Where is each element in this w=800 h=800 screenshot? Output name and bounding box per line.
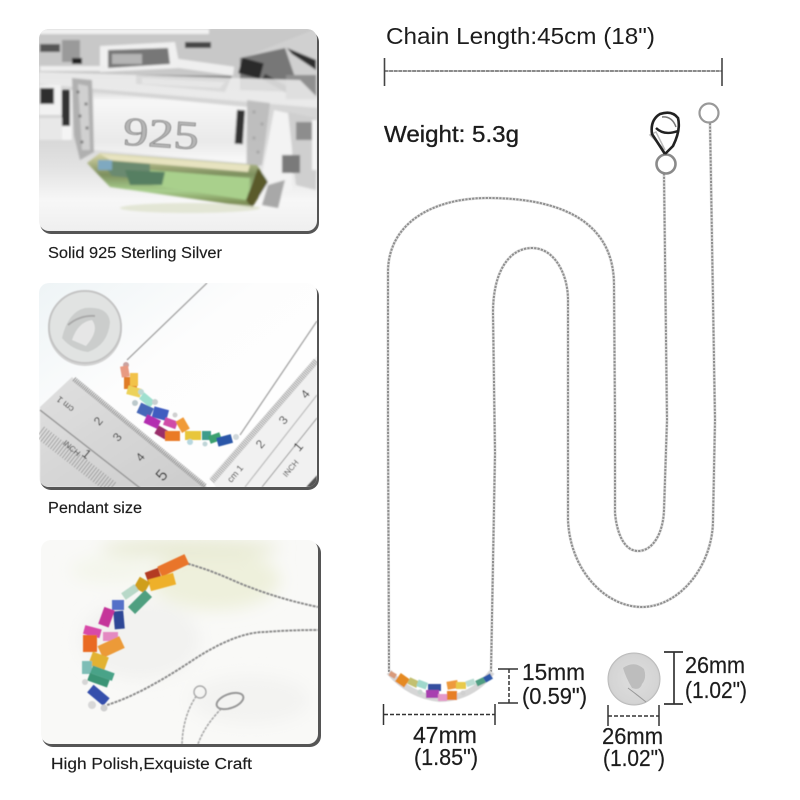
left ruler: 4 — [133, 450, 148, 464]
panel: high polish photo — [41, 538, 321, 747]
label: 1.85 inch: (1.85") — [414, 744, 478, 770]
left ruler — [40, 377, 207, 488]
label: 47mm: 47mm — [413, 722, 477, 748]
right ruler: cm 1 — [225, 463, 245, 484]
right ruler: INCH — [281, 458, 301, 479]
right ruler: 2 — [253, 437, 268, 451]
heading: weight: Weight: 5.3g — [384, 121, 519, 147]
label: 15mm: 15mm — [522, 659, 585, 685]
coin photo — [48, 291, 122, 366]
label: coin 26mm right: 26mm — [685, 652, 745, 678]
left ruler: cm 1 — [55, 394, 76, 414]
main pendant — [388, 671, 493, 701]
necklace chains — [107, 562, 318, 744]
panel: 925 sterling silver photo — [39, 28, 319, 234]
panel: pendant size photo — [39, 283, 319, 490]
right ruler: 1 — [290, 439, 306, 454]
dimension: coin height — [664, 652, 683, 704]
left ruler: 3 — [110, 430, 125, 444]
caption: high polish: High Polish,Exquiste Craft — [51, 756, 253, 773]
dimension line: chain length — [384, 58, 722, 86]
label: coin 26mm bottom: 26mm — [602, 723, 663, 749]
icon: jump ring — [700, 104, 718, 122]
right ruler: 4 — [298, 387, 313, 401]
left ruler: 5 — [153, 467, 172, 485]
necklace chain — [388, 123, 715, 672]
icon: lobster clasp — [650, 113, 679, 174]
left ruler: 2 — [91, 414, 106, 428]
caption: solid silver: Solid 925 Sterling Silver — [48, 245, 222, 262]
dimension: coin width — [608, 705, 659, 726]
left ruler: INCH — [61, 439, 82, 458]
caption: pendant size: Pendant size — [48, 500, 142, 517]
engraved 925 mark: 925 — [122, 108, 201, 159]
right ruler — [209, 356, 317, 487]
dimension: pendant height — [498, 669, 518, 703]
pendant gems — [120, 362, 239, 447]
label: coin 1.02 inch bottom: (1.02") — [603, 745, 665, 771]
icon: reference coin — [608, 653, 660, 705]
left ruler: 1 — [79, 446, 94, 462]
label: coin 1.02 inch right: (1.02") — [685, 677, 747, 703]
dimension: pendant width — [384, 704, 495, 725]
rainbow pendant gems — [82, 554, 189, 712]
label: 0.59 inch: (0.59") — [522, 683, 587, 709]
heading: chain length: Chain Length:45cm (18") — [386, 23, 655, 49]
right ruler: 3 — [276, 413, 291, 427]
